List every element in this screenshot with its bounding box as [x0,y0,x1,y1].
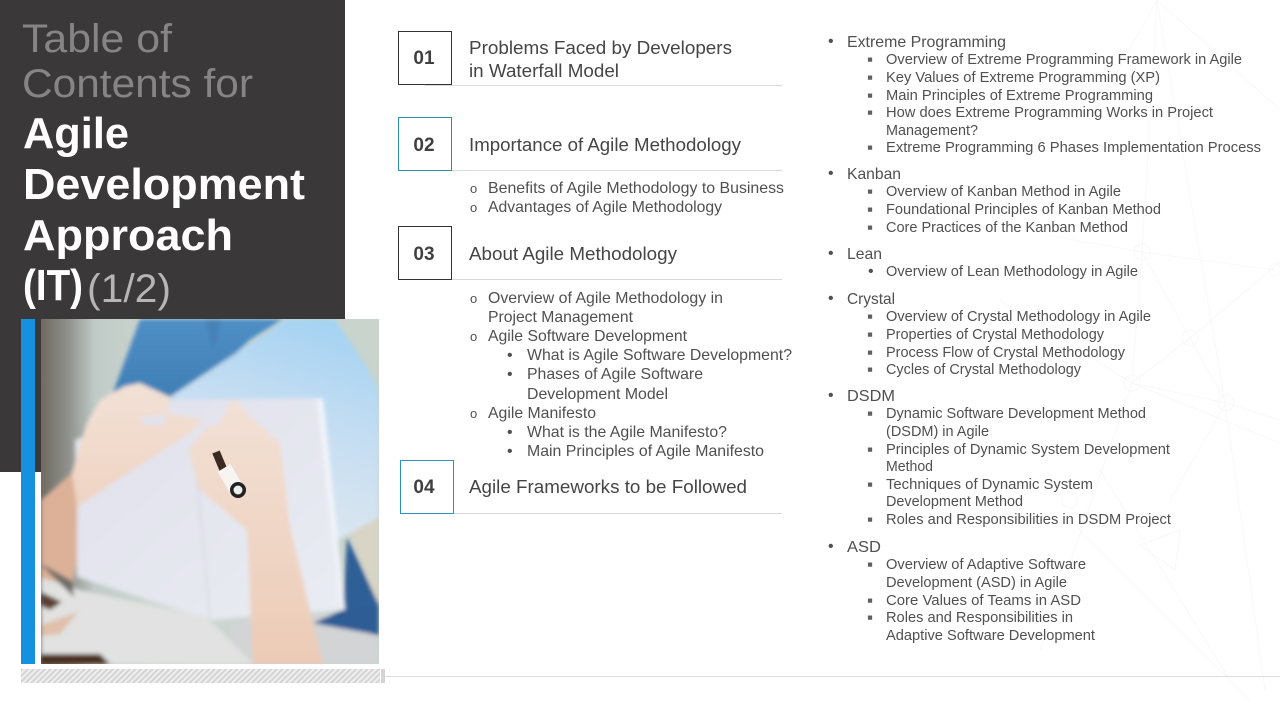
sub-list 03: Overview of Agile Methodology in [488,290,723,307]
number box 02: 02 [413,135,435,156]
sub-list 02 [470,180,784,216]
right list: ASD: ▪ [867,608,873,627]
right list: Extreme Programming: Overview of Extreme Programming Framework in Agile [886,52,1242,68]
right list: Extreme Programming: ▪ [867,86,873,105]
right list: DSDM: Method [886,459,933,475]
title: Approach [23,211,233,260]
sub-list 02: o [470,200,477,215]
sub-list 03: • [507,443,513,460]
right list: DSDM: Development Method [886,494,1023,510]
section 01 [398,32,782,86]
right list: Extreme Programming: Extreme Programming 6 Phases Implementation Process [886,140,1261,156]
sub-list 03: • [507,366,513,383]
right list: ASD: Development (ASD) in Agile [886,575,1067,591]
heading 02: Importance of Agile Methodology [469,134,742,155]
right list: Kanban: • [828,165,834,182]
right list: Kanban [828,165,1161,237]
right list: Extreme Programming: ▪ [867,103,873,122]
right list: Crystal: • [828,290,834,307]
title: Table of [22,17,173,61]
title: (1/2) [87,267,171,311]
sub-list 02: Benefits of Agile Methodology to Business [488,180,784,197]
sub-list 03: Project Management [488,309,634,326]
right list: ASD: • [828,538,834,555]
right list: Lean: • [828,245,834,262]
sub-list 02: Advantages of Agile Methodology [488,199,722,216]
right list: Extreme Programming [828,33,1261,157]
right list: DSDM: • [828,387,834,404]
right list: Crystal: Process Flow of Crystal Methodology [886,345,1126,361]
sub-list 02: o [470,181,477,196]
right list: Crystal: Properties of Crystal Methodology [886,327,1105,343]
number box 04: 04 [413,477,435,498]
right list: Kanban: ▪ [867,218,873,237]
right list: Kanban: Foundational Principles of Kanban Method [886,202,1161,218]
sub-list 03 [470,290,792,460]
right list: ASD: ▪ [867,591,873,610]
right list: Extreme Programming: Extreme Programming [847,34,1006,51]
right list: Kanban: ▪ [867,182,873,201]
right list: Crystal: ▪ [867,307,873,326]
sub-list 03: Phases of Agile Software [527,366,703,383]
title: Agile [23,109,129,158]
right list: DSDM: Principles of Dynamic System Development [886,442,1170,458]
right list: Crystal [828,290,1151,379]
sub-list 03: Agile Manifesto [488,405,596,422]
section 02 [398,118,784,216]
right list: Crystal: ▪ [867,343,873,362]
dark title panel [0,0,345,472]
heading 01: Problems Faced by Developers [469,37,732,58]
section 04 [400,460,782,514]
right list: Crystal: Crystal [847,291,895,308]
right list: Lean [828,245,1138,280]
title: (IT) [23,261,83,310]
right list: DSDM: ▪ [867,404,873,423]
number box 04 [400,460,454,514]
right list: DSDM: Roles and Responsibilities in DSDM Project [886,512,1171,528]
right list: Crystal: Overview of Crystal Methodology in Agile [886,309,1151,325]
right list: Extreme Programming: ▪ [867,68,873,87]
right list: Kanban: ▪ [867,200,873,219]
right list: DSDM: Dynamic Software Development Method [886,406,1146,422]
photo: hands writing in notebook [41,319,379,664]
sub-list 03: Agile Software Development [488,328,688,345]
sub-list 03: • [507,347,513,364]
right list: Extreme Programming: ▪ [867,138,873,157]
sub-list 03: o [470,329,477,344]
title: Development [23,160,305,209]
right list: Extreme Programming: • [828,33,834,50]
background network pattern [1000,0,1280,700]
right list: Kanban: Overview of Kanban Method in Agile [886,184,1121,200]
sub-list 03: • [507,424,513,441]
blue accent bar [21,319,35,664]
title: Contents for [22,62,253,106]
right list: Lean: • [868,263,874,280]
heading 01 [469,37,732,81]
right list: DSDM: ▪ [867,475,873,494]
right list: DSDM: Techniques of Dynamic System [886,477,1093,493]
right list: Extreme Programming: Key Values of Extreme Programming (XP) [886,70,1160,86]
sub-list 03: Main Principles of Agile Manifesto [527,443,764,460]
right list: ASD: Core Values of Teams in ASD [886,593,1081,609]
right list: ASD: ▪ [867,555,873,574]
number box 03 [398,226,452,280]
sub-list 03: o [470,291,477,306]
sub-list 03: o [470,406,477,421]
right list: ASD [828,538,1095,644]
number box 01 [398,32,452,84]
sub-list 03: What is the Agile Manifesto? [527,424,727,441]
hatched footer strip [21,669,380,683]
right list: Kanban: Kanban [847,166,901,183]
right list: Kanban: Core Practices of the Kanban Method [886,220,1128,236]
right list: Crystal: ▪ [867,325,873,344]
right list: Extreme Programming: Management? [886,123,978,139]
right list: Extreme Programming: How does Extreme Programming Works in Project [886,105,1213,121]
number box 02 [398,118,452,170]
heading 01: in Waterfall Model [469,60,619,81]
right list: Lean: Lean [847,246,882,263]
title [22,17,305,311]
sub-list 03: Development Model [527,386,668,403]
right list: ASD: Overview of Adaptive Software [886,557,1086,573]
sub-list 03: What is Agile Software Development? [527,347,792,364]
right list: DSDM: ▪ [867,510,873,529]
heading 04: Agile Frameworks to be Followed [469,476,747,497]
right list: ASD: Adaptive Software Development [886,628,1095,644]
right list: DSDM: DSDM [847,388,895,405]
right list: Crystal: Cycles of Crystal Methodology [886,362,1082,378]
right list: DSDM: (DSDM) in Agile [886,424,989,440]
section 03 [398,226,792,460]
right list: Extreme Programming: ▪ [867,50,873,69]
right list: ASD: ASD [847,539,881,556]
right list: DSDM: ▪ [867,440,873,459]
right list: ASD: Roles and Responsibilities in [886,610,1073,626]
number box 01: 01 [413,48,435,69]
right list: Extreme Programming: Main Principles of Extreme Programming [886,88,1153,104]
heading 03: About Agile Methodology [469,243,678,264]
right list: Lean: Overview of Lean Methodology in Agile [886,264,1138,280]
number box 03: 03 [413,244,435,265]
right list: Crystal: ▪ [867,360,873,379]
right list: DSDM [828,387,1171,529]
